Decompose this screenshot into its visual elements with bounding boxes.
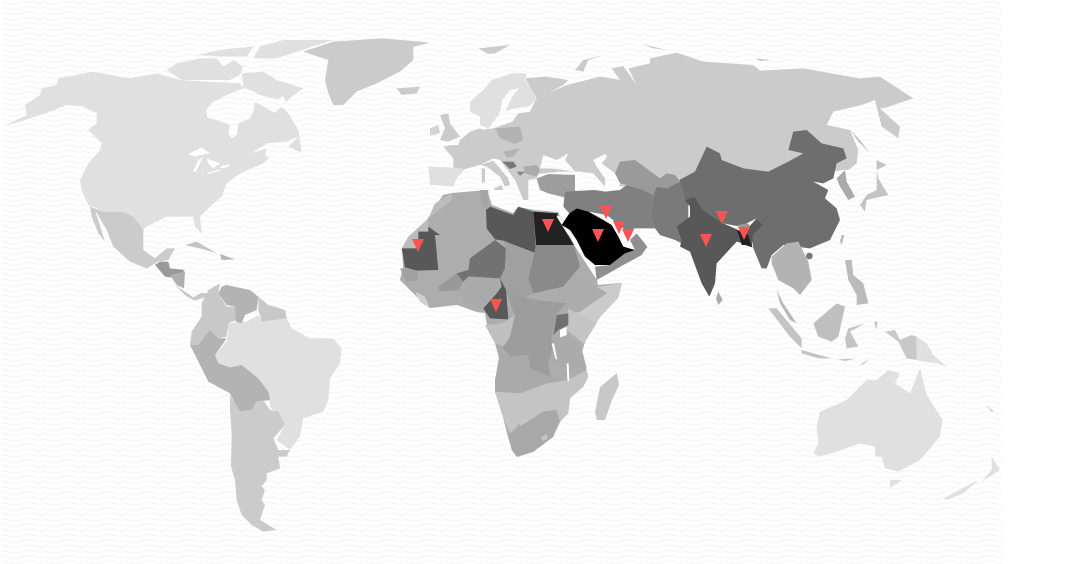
Iran (593, 185, 655, 230)
Russia and Kazakhstan (518, 53, 913, 187)
Borneo (813, 303, 845, 342)
Serbia and Bulgaria (523, 165, 540, 177)
Australia (813, 368, 943, 472)
Canada and United States (4, 72, 302, 233)
United Kingdom (440, 113, 460, 142)
Mauritania (402, 227, 440, 271)
Guianas (258, 297, 287, 322)
Chad (500, 241, 533, 300)
Hainan (806, 253, 813, 259)
Tasmania (890, 480, 902, 488)
Albania (517, 172, 525, 176)
Greenland (303, 38, 430, 105)
Lake Tanganyika (552, 343, 557, 360)
Brazil (215, 315, 342, 450)
Madagascar (595, 373, 619, 420)
Svalbard (478, 45, 510, 54)
Halmahera (874, 322, 877, 330)
continent: Africa (400, 190, 622, 457)
Nigeria (458, 277, 502, 308)
Lesotho (541, 434, 548, 441)
Sri Lanka (716, 292, 723, 305)
Novaya Zemlya (575, 55, 603, 72)
continent: South America (173, 283, 342, 532)
marker: Bangladesh (738, 227, 750, 240)
Hudson Bay and Great Lakes (188, 87, 303, 174)
Turkey (537, 174, 575, 200)
Colombia and Ecuador (190, 283, 237, 345)
Egypt (533, 212, 574, 245)
Yemen and Oman (595, 233, 647, 280)
Baltic Sea (488, 107, 531, 129)
Ellesmere Island (253, 40, 333, 58)
Guinea area (415, 292, 430, 308)
Lake Superior (188, 147, 210, 157)
South Africa (508, 410, 558, 457)
Central Africa and DR Congo (498, 293, 567, 377)
Central Asia (615, 160, 680, 195)
India (677, 197, 763, 297)
Middle East and Central Asia (562, 154, 693, 280)
Spain (428, 167, 465, 187)
continent: Oceania and Southeast Asia islands (768, 290, 1000, 500)
Lake Victoria (560, 327, 567, 337)
Uganda (553, 313, 568, 335)
Cameroon (483, 278, 508, 319)
New Siberian Islands (755, 58, 772, 61)
Java (802, 350, 832, 358)
Italy (480, 161, 510, 187)
Malay Peninsula (777, 290, 797, 323)
Cuba (185, 242, 217, 253)
continent: Europe (428, 73, 575, 200)
Hungary (503, 148, 520, 157)
marker: Kuwait (613, 221, 625, 234)
Central America south (170, 272, 185, 288)
Caspian Sea (593, 154, 620, 190)
Ethiopia (537, 277, 607, 313)
China and Myanmar (679, 130, 847, 268)
Namibia, Botswana and Mozambique (495, 370, 588, 433)
Burkina Faso (438, 273, 463, 292)
Senegal (400, 268, 418, 282)
Thailand, Laos and Vietnam (772, 242, 812, 295)
Arctic island north (197, 47, 253, 57)
Somalia (575, 283, 622, 342)
Sumatra (768, 308, 802, 348)
Iceland (397, 87, 420, 95)
Peru and Bolivia (190, 330, 270, 412)
Angola and Zambia (495, 352, 567, 393)
Central America north (155, 262, 185, 278)
Corsica and Sardinia (482, 168, 485, 183)
New Guinea west (885, 330, 917, 360)
Sulawesi (845, 323, 865, 348)
markers: red triangles (412, 206, 750, 312)
New Zealand south (943, 480, 978, 500)
Gulf of Bothnia (500, 88, 519, 113)
Timor (859, 359, 871, 365)
Morocco (402, 193, 452, 248)
Kenya (567, 308, 597, 343)
Tunisia (480, 190, 488, 210)
Bangladesh (737, 230, 753, 247)
Bhutan (738, 223, 750, 228)
New Caledonia (985, 405, 993, 412)
Western and Eastern Europe (443, 103, 575, 200)
Lake Ontario (220, 164, 231, 168)
Tanzania (550, 335, 587, 370)
Libya (486, 207, 536, 253)
marker: Egypt (542, 219, 554, 232)
marker: Mauritania (412, 239, 424, 252)
Afghanistan and Pakistan (650, 177, 693, 247)
Chile, Argentina and Uruguay (230, 395, 290, 532)
Lesser Sunda Islands (837, 358, 857, 361)
marker: India (700, 234, 712, 247)
Japan (860, 160, 888, 212)
Hudson Bay (206, 88, 255, 138)
Lake Huron (207, 158, 220, 168)
Sakhalin (850, 129, 870, 153)
New Zealand north (982, 457, 1000, 482)
Poland (495, 127, 523, 144)
Franz Josef Land (642, 44, 667, 50)
Korea (837, 170, 855, 200)
Bosnia (502, 162, 517, 169)
marker: Cameroon (490, 299, 502, 312)
Lake Michigan (193, 157, 203, 172)
Gabon and Congo (485, 315, 515, 347)
continent: Russia and northern Asia (478, 44, 913, 187)
Taiwan (840, 235, 844, 245)
Lake Malawi (567, 363, 569, 382)
Hispaniola (220, 254, 235, 260)
Venezuela (218, 285, 258, 323)
Lake Erie (206, 169, 220, 174)
Scandinavia and Finland (470, 73, 537, 128)
Baffin Island (238, 72, 303, 102)
Ireland (430, 125, 440, 136)
Africa west and north countries (400, 190, 580, 319)
Hudson Strait (243, 87, 285, 113)
Levant and Iraq (563, 190, 607, 215)
continent: North America (4, 38, 430, 288)
Africa base (400, 190, 622, 457)
Africa central and south countries (485, 293, 597, 457)
Gulf of Saint Lawrence (252, 137, 303, 157)
Mexico (90, 207, 175, 268)
marker: Qatar (622, 229, 634, 242)
marker: Iraq (600, 206, 612, 219)
Saudi Arabia (562, 208, 635, 265)
Sudan (528, 245, 580, 293)
Black Sea (540, 153, 575, 172)
marker: Saudi Arabia (592, 229, 604, 242)
Sicily (493, 185, 503, 190)
continent: Asia south and east (677, 129, 888, 305)
marker: Northern India (716, 211, 728, 224)
Panama (173, 283, 210, 301)
Papua New Guinea (917, 337, 947, 367)
Gulf of Suez (557, 216, 570, 235)
Niger (457, 240, 506, 282)
Philippines (845, 260, 868, 305)
Arctic islands (167, 58, 243, 80)
